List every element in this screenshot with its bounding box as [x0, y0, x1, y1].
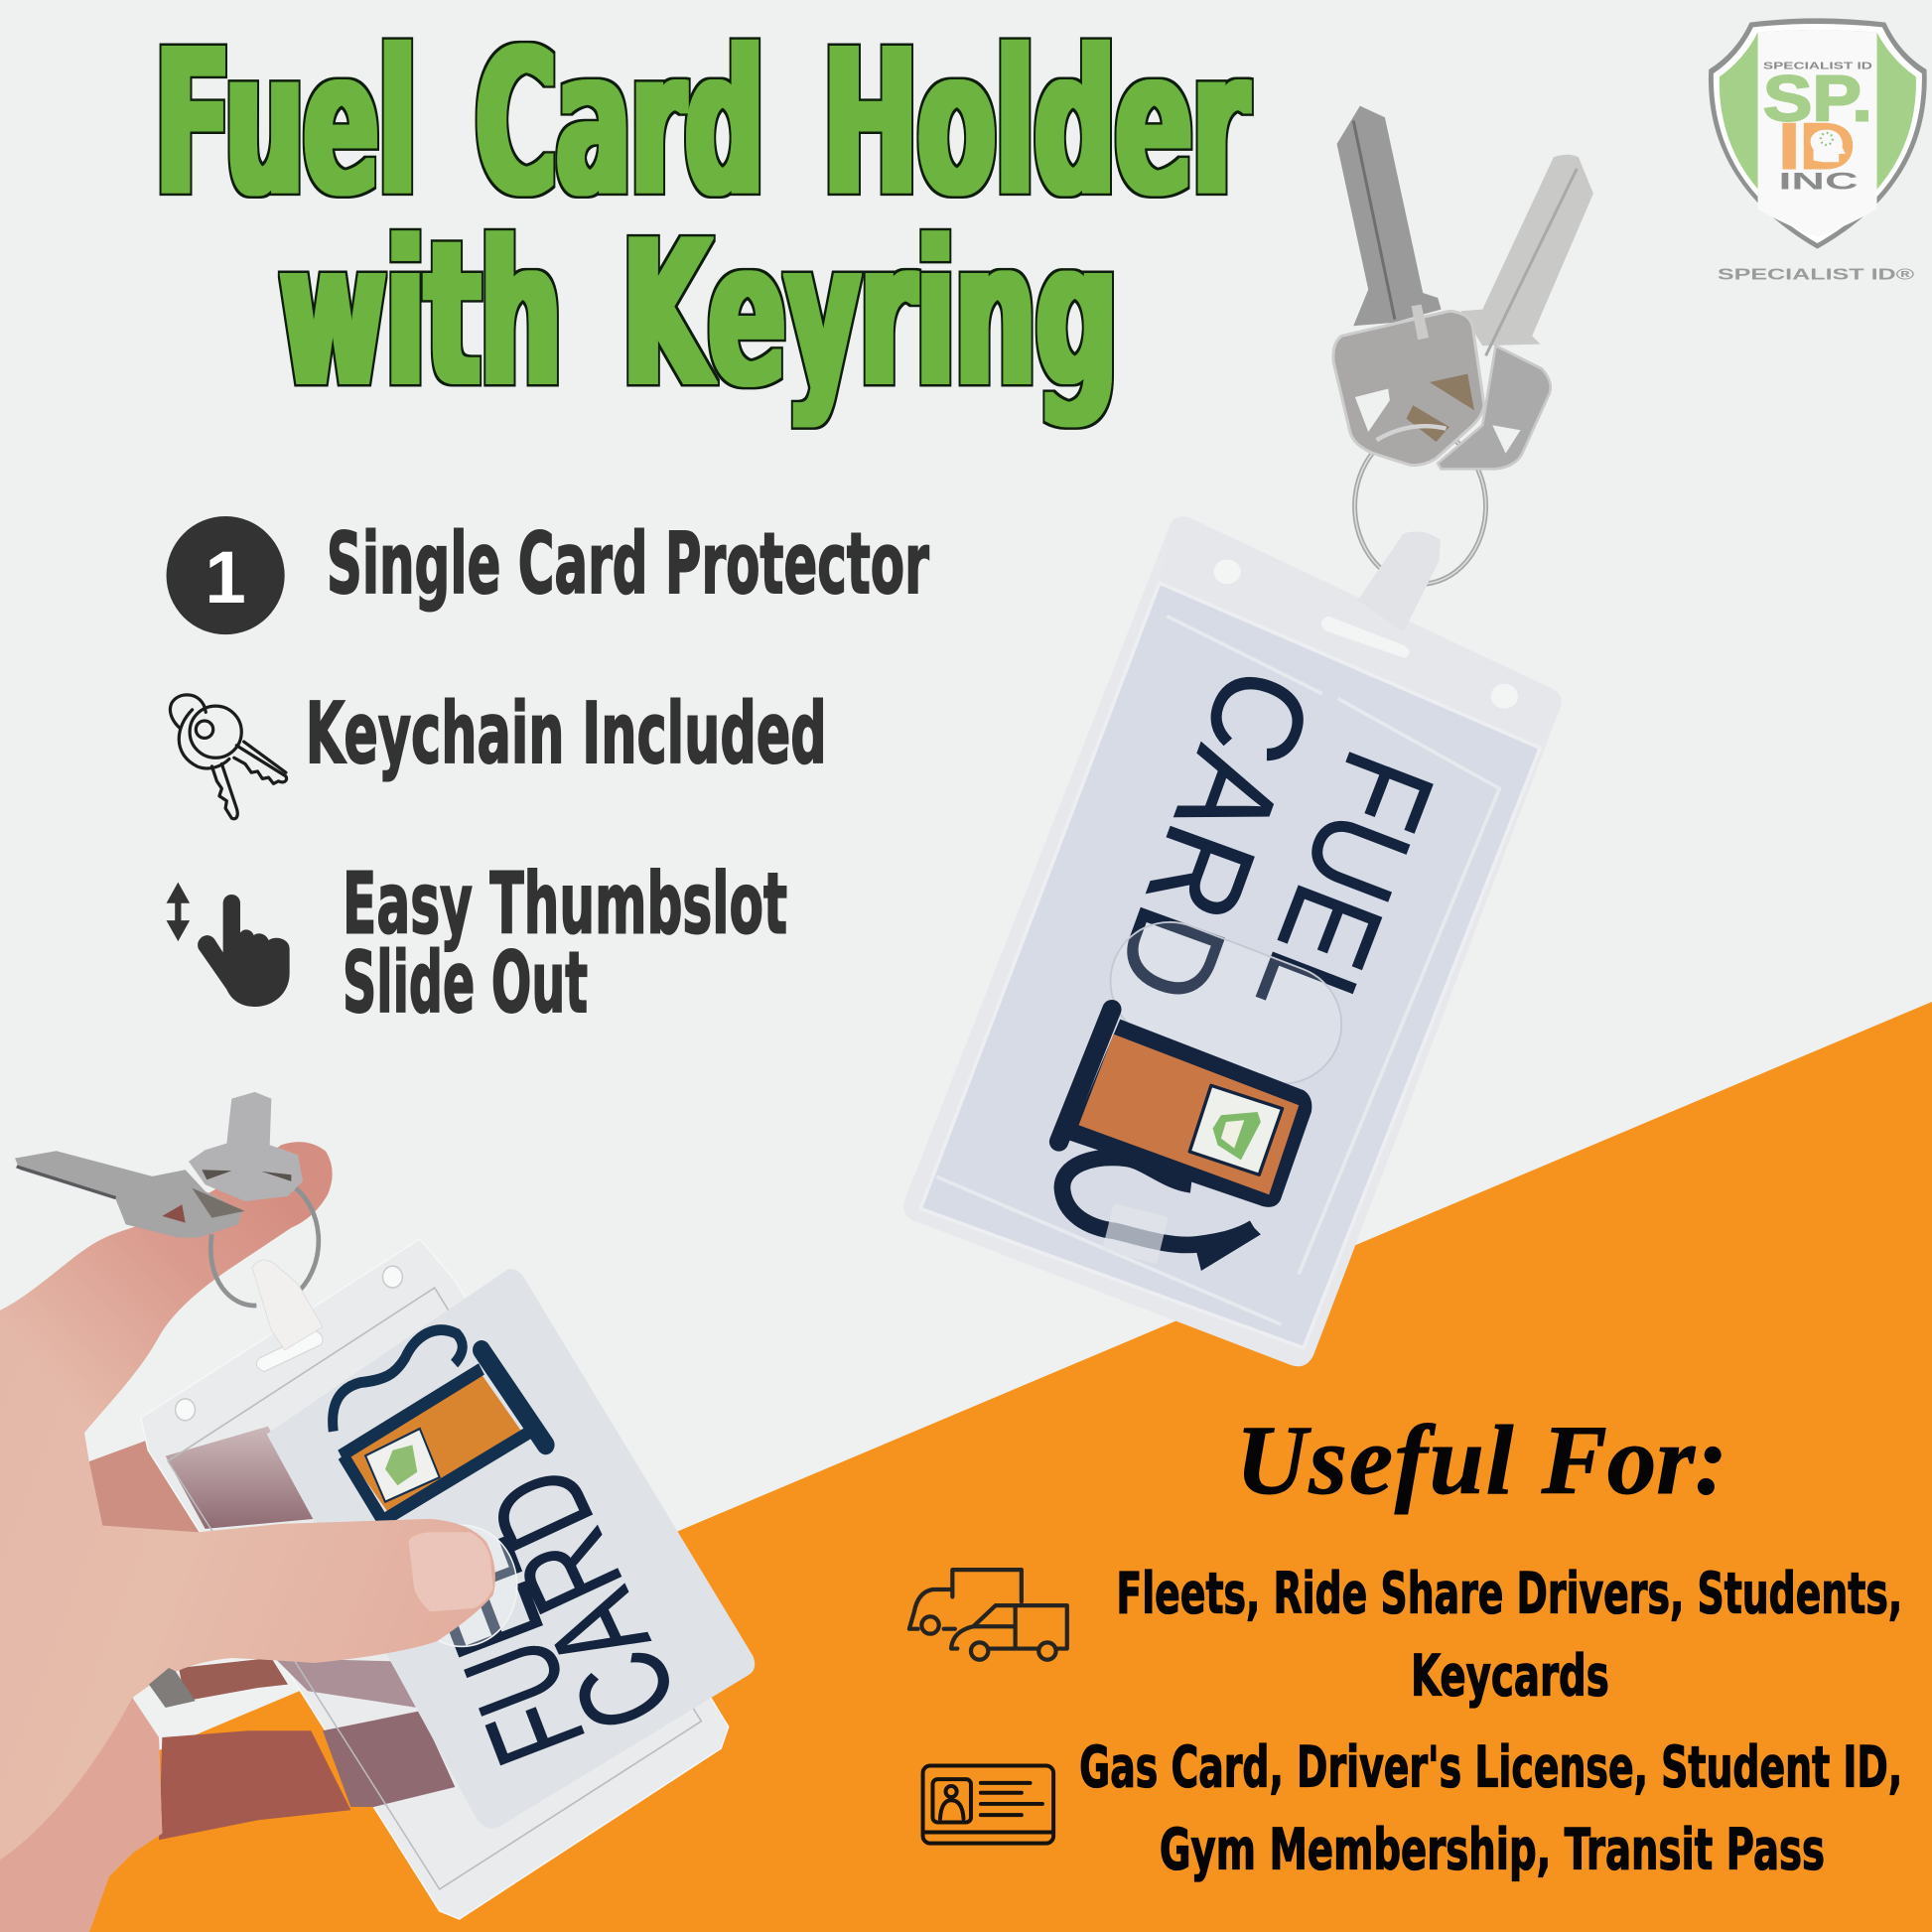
icon: delivery trucks [909, 1570, 1067, 1660]
tab [1358, 531, 1441, 632]
fuel pump graphic [1059, 1010, 1311, 1271]
lower hand shading [0, 1698, 162, 1932]
logo: Specialist ID shield [1709, 18, 1927, 284]
card text: CARD [1088, 651, 1341, 1020]
title: Card [476, 8, 763, 240]
logo: Specialist ID shield: SPECIALIST ID [1763, 61, 1872, 71]
text: gas card [1079, 1735, 1902, 1883]
feature: single card protector [167, 515, 929, 634]
holder top strip [1160, 516, 1562, 748]
card text [1088, 651, 1462, 1041]
card [267, 1269, 755, 1829]
heading: useful for [1236, 1407, 1727, 1515]
holder inner frame line [168, 1288, 701, 1889]
punch holes and slot [1213, 559, 1518, 709]
icon: number one badge [167, 516, 285, 634]
logo: Specialist ID shield: ID [1779, 109, 1855, 182]
fuel pump graphic [333, 1330, 546, 1646]
feature: easy thumbslot [167, 855, 787, 1032]
label: easy thumbslot slide out: Easy Thumbslot [343, 855, 787, 952]
inner frame highlights [936, 617, 1499, 1324]
orange diagonal panel [0, 1002, 1932, 1932]
product photo: holder with keys [903, 106, 1593, 1366]
thumbnail [409, 1532, 493, 1611]
feature: keychain included [170, 685, 827, 819]
palm, index finger and thumb [0, 1142, 495, 1932]
icon: number one badge: 1 [205, 536, 246, 619]
logo: Specialist ID shield: SP. [1763, 63, 1872, 135]
title: Fuel [155, 8, 416, 240]
title: with [280, 199, 562, 431]
keys and ring [15, 1092, 319, 1306]
heading: useful for: For: [1541, 1407, 1727, 1515]
text: fleets: Keycards [1411, 1644, 1609, 1710]
thumb oval [1093, 904, 1359, 1101]
label: easy thumbslot slide out: Slide Out [343, 934, 588, 1032]
label: keychain included: Keychain Included [306, 685, 827, 782]
title: Keyring [622, 199, 1118, 431]
holder [141, 1239, 729, 1919]
tab [252, 1260, 323, 1350]
holder body [903, 516, 1562, 1366]
ring [149, 1668, 196, 1708]
card text: CARD [461, 1448, 705, 1752]
icon: id card [923, 1765, 1053, 1844]
index finger shading [0, 1142, 333, 1433]
fingers behind holder [86, 1430, 350, 1840]
card text [398, 1448, 705, 1782]
product photo: hand sliding card out [0, 1092, 755, 1932]
icon: pointing hand [198, 895, 290, 1007]
icon: keys [170, 695, 287, 819]
label: easy thumbslot slide out [343, 855, 787, 1032]
card text: FUEL [398, 1523, 613, 1782]
card text: FUEL [1229, 735, 1462, 1041]
text: fleets [1116, 1562, 1902, 1710]
icon: up down arrow [167, 883, 190, 941]
heading: useful for: Useful [1236, 1407, 1515, 1515]
fingers seen through holder [166, 1427, 455, 1807]
title [155, 8, 1248, 431]
logo: Specialist ID shield: INC [1779, 169, 1859, 196]
title: Holder [823, 8, 1248, 240]
holder inner window [920, 583, 1540, 1348]
keys and ring [1333, 106, 1593, 584]
label: single card protector: Single Card Protector [327, 515, 929, 613]
logo: Specialist ID shield: SPECIALIST ID® [1718, 267, 1915, 284]
section: useful for [909, 1407, 1902, 1883]
